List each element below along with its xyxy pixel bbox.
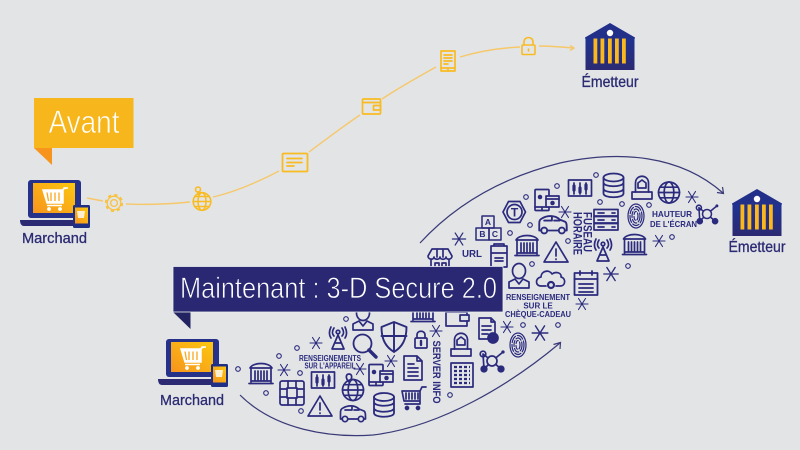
- icon: shield: [382, 322, 406, 352]
- label: Émetteur top: Émetteur: [582, 72, 639, 91]
- label: time zone: FUSEAU: [580, 212, 592, 252]
- icon: magnifier: [354, 334, 376, 357]
- label: gift card info: SUR LE: [523, 302, 553, 310]
- icon: tablet with stars: [369, 364, 393, 386]
- icon: cloud gear: [536, 271, 565, 288]
- callout: Avant: Avant: [48, 104, 120, 140]
- label: device info: SUR L'APPAREIL: [304, 362, 356, 370]
- icon: headset person: [451, 333, 471, 356]
- icon: globe pin: [342, 374, 364, 400]
- label: gift card info: RENSEIGNEMENT: [506, 293, 570, 302]
- label: screen height: [650, 209, 697, 229]
- icon: person: [353, 306, 373, 330]
- icon: cart: [402, 387, 426, 410]
- merchant bottom: [158, 339, 228, 409]
- icon: lock: [522, 38, 535, 54]
- icon: store: [428, 249, 452, 270]
- icon: tablet: [441, 51, 455, 71]
- label: server info: SERVER INFO: [430, 340, 442, 404]
- icon: headset person: [632, 176, 652, 199]
- icon: globe: [658, 182, 680, 203]
- label: gift card info: [505, 293, 571, 319]
- icon: alphabet blocks: B: [479, 229, 486, 239]
- small circles: [236, 173, 674, 413]
- upper swoosh arrow: [420, 157, 724, 243]
- icon: sliders: [568, 180, 592, 196]
- callout: Maintenant 3-D Secure 2.0: Maintenant : 3-D Secure 2.0: [180, 272, 497, 305]
- label: time zone: HORAIRE: [570, 212, 582, 255]
- icon: warning: [544, 242, 568, 262]
- label: Émetteur right: Émetteur: [728, 237, 786, 256]
- icon: database: [374, 393, 394, 417]
- label: screen height: DE L'ÉCRAN: [650, 219, 697, 229]
- icon: fingerprint: [510, 333, 526, 357]
- icon: warning: [308, 396, 332, 416]
- icon: car: [340, 406, 366, 422]
- icon: network: [480, 351, 504, 372]
- icon: gear: [106, 195, 122, 211]
- icon: tablet with stars: [535, 190, 559, 210]
- icon: lock: [415, 331, 427, 348]
- icon: bank: [622, 234, 646, 254]
- icon: document: [404, 356, 422, 380]
- icon: alphabet blocks: C: [492, 229, 498, 239]
- lower swoosh arrow: [240, 342, 560, 436]
- icon: taxi sign: T: [511, 206, 519, 220]
- icon: network: [696, 205, 718, 224]
- label: time zone: [570, 212, 592, 255]
- icon: car: [539, 216, 567, 233]
- callout: Avant: [34, 98, 134, 165]
- icon: database: [604, 174, 624, 197]
- icon: code grid: [451, 363, 473, 387]
- label: screen height: HAUTEUR: [652, 209, 692, 219]
- icon cluster: data elements: [236, 173, 718, 422]
- icon: fingerprint: [628, 204, 644, 228]
- icon: document check: [479, 318, 498, 343]
- icon: clipboard: [491, 244, 507, 267]
- merchant top: Marchand: [22, 230, 87, 247]
- label: device info: [299, 354, 361, 370]
- icon: antenna: [594, 239, 612, 261]
- issuer bank right: [728, 189, 786, 256]
- icon: calendar: [574, 271, 598, 295]
- merchant bottom: Marchand: [160, 392, 224, 409]
- icon: bank: [249, 364, 273, 384]
- icon: server rack: [594, 210, 618, 230]
- label: gift card info: CHÈQUE-CADEAU: [505, 310, 571, 319]
- asterisks: [278, 192, 698, 376]
- icon: wallet: [446, 308, 469, 326]
- icon: person: [509, 264, 529, 288]
- top issuer bank: [582, 23, 639, 91]
- icon: alphabet blocks: A: [485, 217, 491, 227]
- icon: bank partial: [411, 302, 435, 322]
- label: URL: URL: [462, 249, 482, 260]
- icon: taxi sign: [503, 202, 526, 222]
- merchant top: [20, 180, 90, 247]
- icon: globe with pin: [193, 187, 211, 210]
- callout: Maintenant 3-D Secure 2.0: [173, 266, 503, 329]
- icon: antenna: [330, 327, 346, 349]
- label: device info: RENSEIGNEMENTS: [299, 354, 361, 363]
- icon: sliders: [312, 372, 334, 388]
- icon: wallet: [362, 99, 380, 114]
- icon: alphabet blocks: [476, 216, 501, 240]
- icon: card: [282, 154, 308, 172]
- icon: bank: [515, 236, 539, 256]
- icon: EMV chip: [280, 381, 304, 405]
- top yellow flow path: [87, 46, 574, 204]
